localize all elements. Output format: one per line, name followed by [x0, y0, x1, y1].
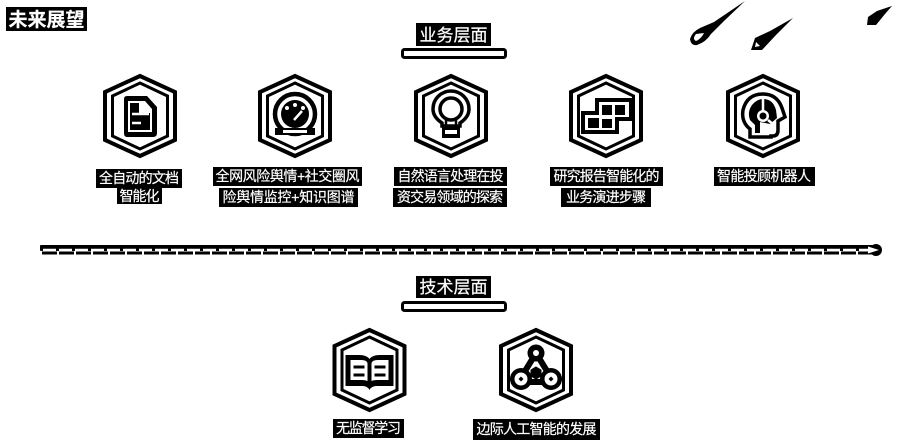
title: 未来展望: [8, 9, 84, 31]
heading: business level: [402, 23, 506, 58]
heading: business level: 业务层面: [420, 26, 488, 45]
icon: open book: [334, 330, 404, 410]
item: edge AI: [473, 330, 600, 440]
item: robo advisor: [714, 76, 815, 186]
label: 资交易领域的探索: [397, 189, 503, 205]
label: 全网风险舆情+社交圈风: [216, 168, 360, 184]
icon: head with headset: [728, 76, 798, 156]
label: 研究报告智能化的: [554, 168, 660, 184]
label: 无监督学习: [336, 420, 401, 436]
meteor 3: [867, 6, 892, 25]
label: 边际人工智能的发展: [476, 421, 596, 437]
icon: blocks: [571, 76, 641, 156]
label: 智能投顾机器人: [717, 168, 811, 184]
label: [213, 167, 362, 207]
icon: light bulb: [416, 76, 486, 156]
label: 险舆情监控+知识图谱: [222, 189, 354, 205]
icon: gauge: [260, 76, 330, 156]
label: [393, 167, 507, 207]
item: unsupervised learning: [333, 330, 404, 438]
icon: document: [105, 76, 175, 156]
icon: molecule: [501, 330, 571, 410]
item: NLP: [393, 76, 507, 207]
label: 智能化: [120, 188, 160, 204]
heading: technology level: [402, 276, 506, 310]
item: document automation: [96, 76, 182, 204]
label: 全自动的文档: [99, 170, 179, 186]
label: [550, 167, 663, 207]
label: [96, 169, 182, 204]
heading: technology level: 技术层面: [420, 278, 488, 297]
item: risk monitoring: [213, 76, 362, 207]
label: 自然语言处理在投: [398, 168, 504, 184]
label: 业务演进步骤: [566, 189, 646, 205]
meteor 1: [690, 1, 745, 45]
timeline arrow: [40, 244, 882, 256]
meteor 2: [751, 18, 793, 50]
item: research reports: [550, 76, 663, 207]
